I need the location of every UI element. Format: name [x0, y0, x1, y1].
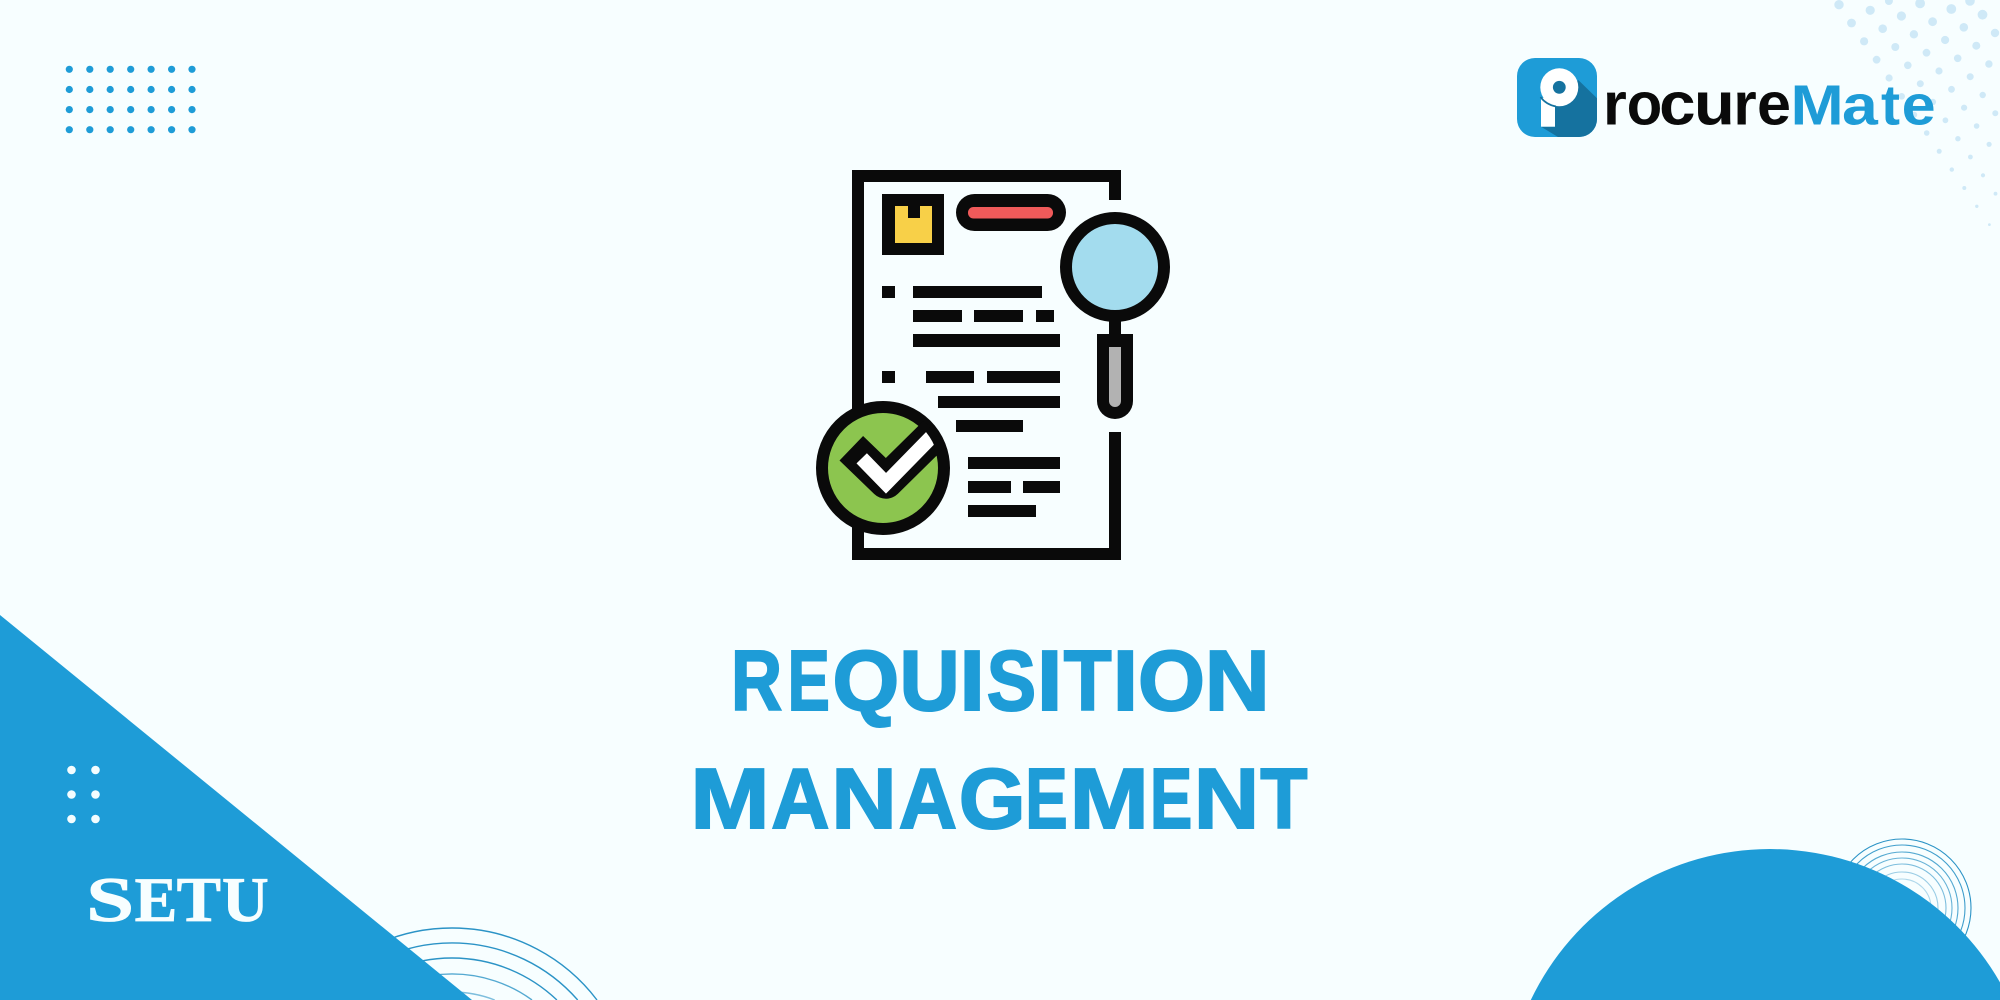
title line 2: A [771, 752, 829, 847]
logo wordmark: u [1694, 70, 1735, 137]
document outline [858, 176, 1115, 554]
title line 2: E [1025, 752, 1068, 847]
title line 2: E [1150, 752, 1192, 847]
logo: ProcureMate [1517, 58, 1936, 137]
logo wordmark: r [1733, 70, 1757, 137]
title line 1: I [1037, 634, 1062, 729]
concentric arcs: bottom right [1833, 839, 1971, 977]
brand: SETU: E [135, 864, 177, 935]
logo wordmark: o [1627, 70, 1662, 137]
dot pattern: top right [1834, 0, 1999, 226]
logo icon [1517, 58, 1597, 137]
title line 1: T [1064, 634, 1112, 729]
title line 2: A [899, 752, 957, 847]
dot grid: on triangle [67, 766, 100, 823]
title line 1: Q [832, 634, 899, 729]
title line 1: O [1138, 634, 1205, 729]
logo wordmark: a [1842, 73, 1879, 137]
title line 1: S [987, 634, 1036, 729]
brand: SETU: U [222, 864, 269, 935]
logo wordmark: e [1757, 70, 1791, 137]
title line 1: R [731, 634, 782, 729]
document text lines [882, 286, 1060, 517]
title line 2: M [690, 752, 770, 847]
title line 2: T [1260, 752, 1307, 847]
title line 1: I [1113, 634, 1138, 729]
icon: package box [882, 194, 944, 255]
logo wordmark: e [1902, 73, 1936, 137]
icon: requisition document with magnifier and check badge [822, 176, 1164, 554]
logo wordmark: t [1881, 73, 1900, 137]
logo wordmark: r [1603, 70, 1627, 137]
red pill label [956, 194, 1066, 231]
brand: SETU: S [86, 864, 134, 935]
logo wordmark: c [1659, 70, 1696, 137]
dot grid: top left [66, 66, 196, 133]
concentric arcs: bottom left [307, 928, 597, 1000]
title line 2: G [959, 752, 1026, 847]
brand: SETU: T [177, 864, 221, 935]
title line 1: E [788, 634, 830, 729]
title line 2: N [1194, 752, 1259, 847]
icon: green check badge [822, 407, 944, 529]
corner circle: bottom right [1531, 849, 2000, 1000]
title line 2: M [1070, 752, 1149, 847]
title line 1: N [1205, 634, 1270, 729]
title line 1: I [959, 634, 985, 729]
icon: magnifying glass [1066, 218, 1164, 419]
title [690, 634, 1307, 847]
title line 2: N [831, 752, 897, 847]
title line 1: U [900, 634, 960, 729]
corner triangle: bottom left [0, 615, 472, 1000]
logo wordmark: M [1790, 73, 1844, 137]
